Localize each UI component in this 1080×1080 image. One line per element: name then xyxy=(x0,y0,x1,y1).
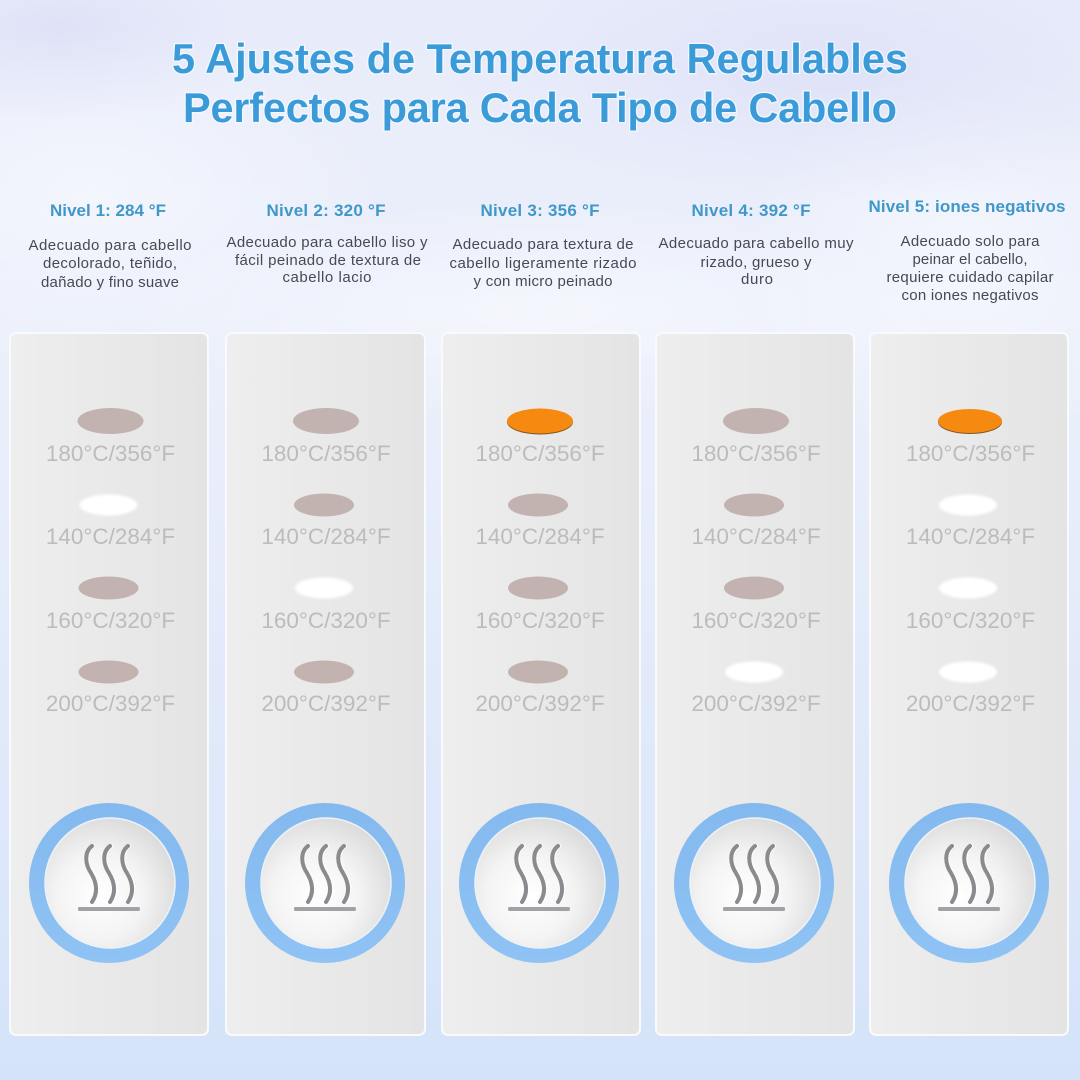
level 4 description: duro xyxy=(741,271,773,288)
level 2 description: Adecuado para cabello liso y xyxy=(226,234,428,251)
panel: level 5: 180°C/356°F xyxy=(906,441,1035,466)
panel: level 4 xyxy=(656,333,854,1035)
title xyxy=(172,35,908,131)
panel: level 1 xyxy=(10,333,208,1035)
title: Perfectos para Cada Tipo de Cabello xyxy=(183,84,897,131)
panel: level 3 xyxy=(442,333,640,1035)
level 2 description: cabello lacio xyxy=(282,269,372,286)
panel: level 5: 200°C/392°F xyxy=(906,691,1035,716)
panel: level 2: 140°C/284°F xyxy=(261,524,391,549)
icon: heat button xyxy=(674,803,834,963)
level 2 description xyxy=(226,201,428,286)
level 4 description: rizado, grueso y xyxy=(700,254,812,271)
level 1 description: dañado y fino suave xyxy=(41,274,179,291)
level 3 description: cabello ligeramente rizado xyxy=(450,255,636,272)
level 4 description: Nivel 4: 392 °F xyxy=(692,201,810,220)
level 3 description: Adecuado para textura de xyxy=(452,236,634,253)
level 1 description xyxy=(28,201,192,291)
panel: level 4: 180°C/356°F xyxy=(691,441,821,466)
level 1 description: Nivel 1: 284 °F xyxy=(50,201,166,220)
level 5 description: Nivel 5: iones negativos xyxy=(868,197,1066,216)
panel: level 4: 140°C/284°F xyxy=(691,524,821,549)
level 5 description: peinar el cabello, xyxy=(912,251,1028,268)
panel: level 1: 140°C/284°F xyxy=(46,524,175,549)
panel: level 2 xyxy=(226,333,425,1035)
level 5 description: Adecuado solo para xyxy=(900,233,1040,250)
level 3 description: Nivel 3: 356 °F xyxy=(480,201,600,220)
icon: heat button xyxy=(245,803,405,963)
panel: level 1: 180°C/356°F xyxy=(46,441,175,466)
level 3 description xyxy=(450,201,636,290)
icon: heat button xyxy=(459,803,619,963)
panel: level 5 xyxy=(870,333,1068,1035)
level 1 description: decolorado, teñido, xyxy=(43,255,177,272)
panel: level 1: 160°C/320°F xyxy=(46,608,175,633)
level 2 description: Nivel 2: 320 °F xyxy=(266,201,386,220)
panel: level 5: 140°C/284°F xyxy=(906,524,1035,549)
panel: level 3: 180°C/356°F xyxy=(475,441,605,466)
panel: level 4: 200°C/392°F xyxy=(691,691,821,716)
icon: heat button xyxy=(889,803,1049,963)
panel: level 2: 160°C/320°F xyxy=(261,608,391,633)
panel: level 1: 200°C/392°F xyxy=(46,691,175,716)
panel: level 4: 160°C/320°F xyxy=(691,608,821,633)
level 2 description: fácil peinado de textura de xyxy=(235,252,421,269)
icon: heat button xyxy=(29,803,189,963)
panel: level 5: 160°C/320°F xyxy=(906,608,1035,633)
level 5 description: con iones negativos xyxy=(902,287,1038,304)
panel: level 3: 200°C/392°F xyxy=(475,691,605,716)
panel: level 2: 200°C/392°F xyxy=(261,691,391,716)
level 4 description: Adecuado para cabello muy xyxy=(658,235,854,252)
title: 5 Ajustes de Temperatura Regulables xyxy=(172,35,908,82)
panel: level 2: 180°C/356°F xyxy=(261,441,391,466)
level 4 description xyxy=(658,201,854,288)
panel: level 3: 160°C/320°F xyxy=(475,608,605,633)
level 3 description: y con micro peinado xyxy=(474,273,612,290)
level 5 description xyxy=(868,197,1066,304)
level 5 description: requiere cuidado capilar xyxy=(886,269,1054,286)
level 1 description: Adecuado para cabello xyxy=(28,237,192,254)
panel: level 3: 140°C/284°F xyxy=(475,524,605,549)
